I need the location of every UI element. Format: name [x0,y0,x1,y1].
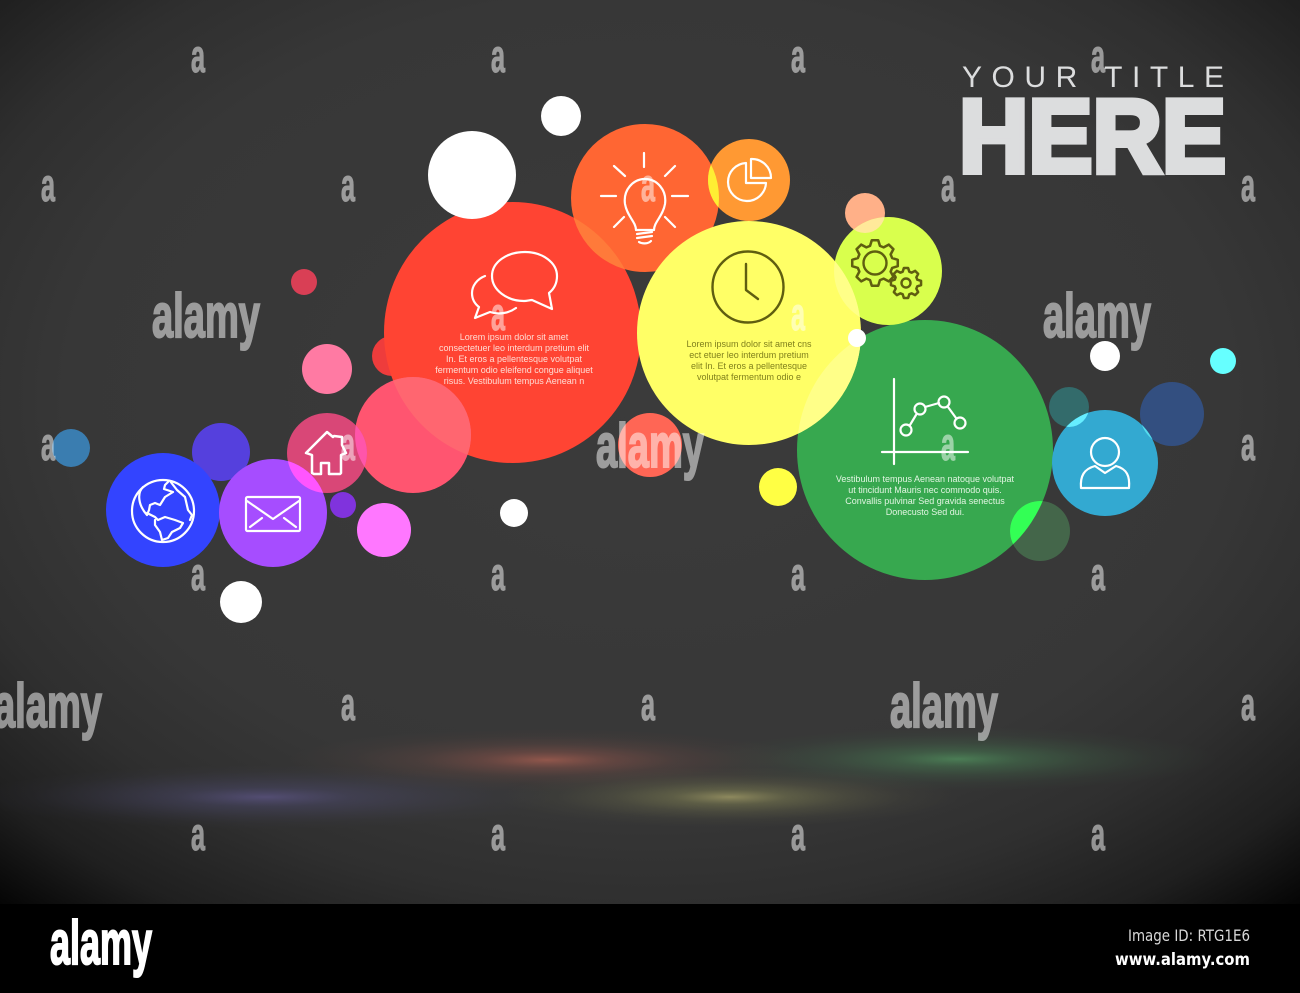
panel: yellow clock circle [637,221,861,445]
watermark overlay: alamy [1043,282,1151,351]
title: YOUR TITLE [962,61,1224,94]
watermark overlay: a [641,159,655,211]
text: green circle body copy: Donecusto Sed dui. [886,507,964,517]
footer url: www.alamy.com [1115,950,1250,970]
icon: gears [852,240,921,298]
watermark overlay: a [791,548,805,600]
dot: white on yellow edge [848,329,866,347]
text: yellow circle body copy: ect etuer leo interdum pretium [689,350,809,360]
panel: lime gears circle [834,193,942,325]
dots: right side [1090,341,1236,374]
panel: purple mail circle [219,459,327,567]
watermark overlay: a [191,30,205,82]
icon: speech bubbles [472,252,557,318]
watermark overlay: a [1091,548,1105,600]
text: green circle body copy: Vestibulum tempus Aenean natoque volutpat [836,474,1015,484]
watermark overlay: a [641,678,655,730]
footer image id: Image ID: RTG1E6 [1128,926,1250,945]
watermark overlay: a [341,678,355,730]
watermark overlay: a [1241,418,1255,470]
icon: envelope [246,497,300,531]
watermark overlay: alamy [596,412,704,481]
watermark overlay: a [941,418,955,470]
icon: clock [712,252,784,322]
text: red circle body copy: fermentum odio eleifend congue aliquet [435,365,593,375]
dot: dark green overlap [1010,501,1070,561]
panel: amber pie chart circle [708,139,790,221]
watermark overlay: a [491,30,505,82]
watermark overlay: a [341,159,355,211]
text: red circle body copy [435,332,593,386]
text: red circle body copy: Lorem ipsum dolor sit amet [460,332,569,342]
watermark overlay: a [41,159,55,211]
watermark overlay: a [791,30,805,82]
text: red circle body copy: In. Et eros a pellentesque volutpat [446,354,583,364]
watermark overlay: alamy [152,282,260,351]
watermark overlay: a [41,418,55,470]
panel: red speech circle [384,202,641,463]
panel: orange bulb circle [571,124,719,272]
small background dots, left cluster [52,96,797,623]
watermark overlay: a [941,159,955,211]
icon: globe [132,480,194,542]
watermark overlay: a [791,288,805,340]
watermark overlay: a [1091,808,1105,860]
watermark overlay: a [1241,159,1255,211]
panel: rose home circle [287,413,367,493]
panel: pink overlap circle [355,377,471,493]
text: green circle body copy [836,474,1015,517]
watermark overlay: a [1241,678,1255,730]
icon: light bulb [601,153,688,243]
text: yellow circle body copy: elit In. Et eros a pellentesque [691,361,807,371]
watermark overlay: a [491,548,505,600]
watermark overlay: a [791,808,805,860]
text: yellow circle body copy: Lorem ipsum dolor sit amet cns [686,339,812,349]
panel: green chart circle [797,320,1053,580]
panel: white bubble [428,131,516,219]
footer logo: alamy [50,909,152,978]
icon: pie chart [728,159,771,201]
text: yellow circle body copy [686,339,812,382]
watermark overlay: a [191,808,205,860]
watermark overlay: a [491,808,505,860]
watermark overlay: a [491,288,505,340]
text: yellow circle body copy: volutpat fermentum odio e [697,372,801,382]
text: green circle body copy: Convallis pulvinar Sed gravida senectus [845,496,1005,506]
floor glows [0,727,1218,829]
watermark overlay: a [191,548,205,600]
panel: blue person circle group [1049,382,1204,516]
watermark overlay: a [1091,30,1105,82]
watermark overlay: a [341,418,355,470]
icon: house [306,432,346,474]
watermark overlay: alamy [890,672,998,741]
icon: person [1081,438,1129,488]
title: HERE [959,79,1226,195]
panel: blue globe circle [106,453,220,567]
icon: line chart [882,379,968,464]
text: red circle body copy: risus. Vestibulum tempus Aenean n [444,376,584,386]
text: red circle body copy: consectetuer leo interdum pretium elit [439,343,590,353]
text: green circle body copy: ut tincidunt Mauris nec commodo quis. [848,485,1002,495]
footer bar [0,904,1300,993]
